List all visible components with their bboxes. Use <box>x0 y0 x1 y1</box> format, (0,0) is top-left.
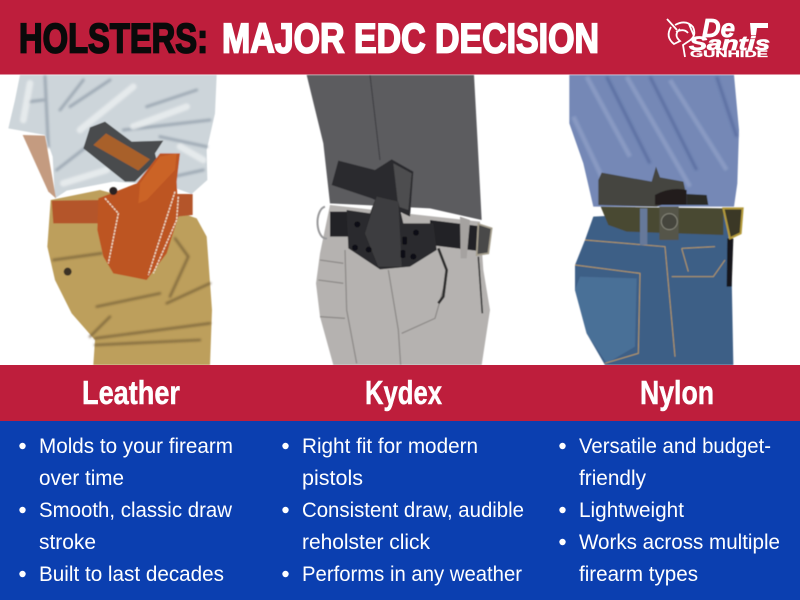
heading: Kydex: Kydex <box>365 374 442 411</box>
holster <box>347 196 437 269</box>
list: nylon benefits: Works across multiple <box>579 530 780 554</box>
arm <box>23 135 56 198</box>
jeans <box>575 210 733 365</box>
panel: feature lists <box>0 421 800 600</box>
title <box>19 14 599 62</box>
list: leather benefits: Smooth, classic draw <box>39 498 232 522</box>
pistol <box>598 167 687 207</box>
belt <box>330 212 483 252</box>
trousers <box>47 190 212 365</box>
pistol <box>332 159 413 217</box>
list: nylon benefits: friendly <box>579 466 646 490</box>
list: leather benefits: Built to last decades <box>39 562 224 586</box>
logo: De Santis Gunhide: De <box>702 13 735 43</box>
shirt <box>307 75 482 220</box>
logo: De Santis Gunhide: GUNHIDE <box>690 49 768 60</box>
heading: Leather: Leather <box>82 374 180 411</box>
photo: kydex holster on belt <box>307 75 492 365</box>
icon: unicorn head <box>667 19 694 57</box>
list: leather benefits: Molds to your firearm <box>39 434 233 458</box>
photo: nylon holster on belt <box>569 75 743 365</box>
heading: Nylon: Nylon <box>640 374 714 411</box>
list: kydex benefits: reholster click <box>302 530 430 554</box>
shirt <box>569 75 739 207</box>
list: nylon benefits <box>559 434 780 586</box>
trousers <box>316 205 490 365</box>
list: kydex benefits: Right fit for modern <box>302 434 478 458</box>
header band <box>0 0 800 74</box>
logo: De Santis Gunhide: Santis <box>689 34 770 55</box>
list: nylon benefits: firearm types <box>579 562 698 586</box>
logo: De Santis Gunhide <box>667 13 770 60</box>
panel: type headings band <box>0 365 800 421</box>
list: kydex benefits: Performs in any weather <box>302 562 522 586</box>
list: leather benefits: stroke <box>39 530 96 554</box>
photo: leather holster on belt <box>8 75 217 365</box>
list: leather benefits: over time <box>39 466 124 490</box>
list: kydex benefits <box>282 434 524 586</box>
shirt <box>8 75 217 198</box>
icon: pistol <box>750 23 768 35</box>
list: kydex benefits: pistols <box>302 466 363 490</box>
list: nylon benefits: Lightweight <box>579 498 684 522</box>
pistol <box>83 122 163 182</box>
belt <box>52 194 193 223</box>
holster <box>97 153 180 280</box>
title: HOLSTERS: <box>19 14 208 62</box>
list: nylon benefits: Versatile and budget- <box>579 434 771 458</box>
belt <box>601 207 723 235</box>
title: MAJOR EDC DECISION <box>222 14 599 62</box>
list: kydex benefits: Consistent draw, audible <box>302 498 524 522</box>
list: leather benefits <box>19 434 233 586</box>
